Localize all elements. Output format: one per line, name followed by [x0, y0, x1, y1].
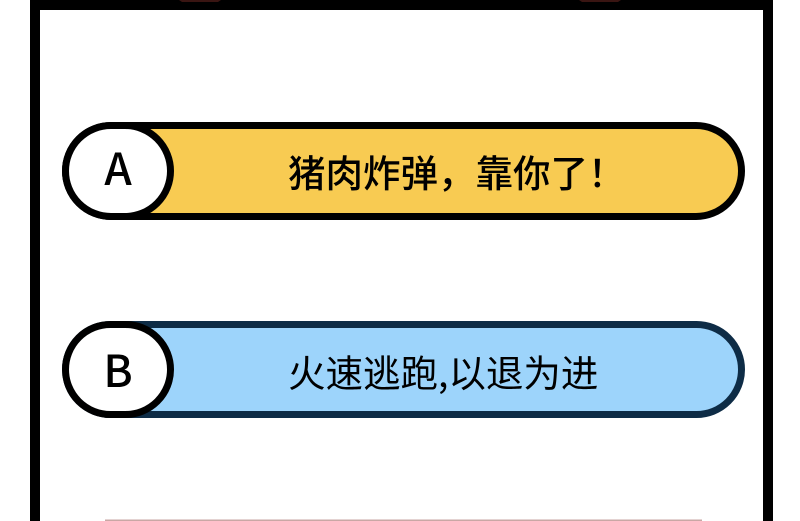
option A text: 猪肉炸弹，靠你了！ — [288, 143, 626, 198]
top decoration: right stub — [579, 0, 621, 2]
option A bar — [66, 126, 742, 216]
option B letter: B — [103, 336, 133, 400]
option A letter: A — [104, 134, 132, 198]
option B badge — [66, 324, 170, 414]
option A — [66, 126, 742, 216]
top decoration: left stub — [179, 0, 221, 2]
option A badge — [66, 126, 170, 216]
option B — [66, 324, 742, 414]
next option top edge — [105, 520, 702, 521]
option B bar — [66, 324, 742, 414]
option B text: 火速逃跑,以退为进 — [288, 343, 598, 398]
